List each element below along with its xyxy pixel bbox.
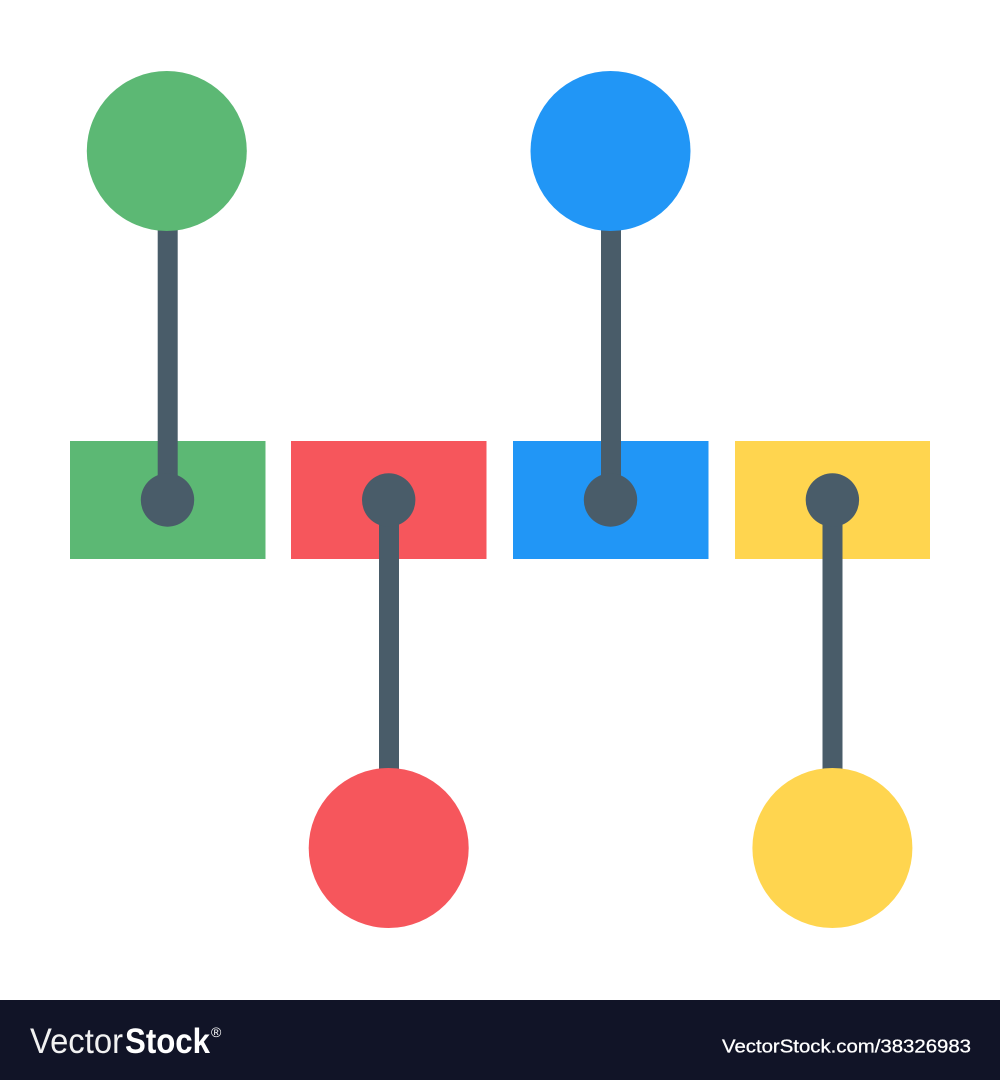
brand name: [30, 1022, 210, 1061]
brand name: Stock: [125, 1022, 210, 1061]
watermark footer bar: [0, 1000, 1000, 1080]
red milestone: [291, 441, 486, 928]
yellow milestone: [735, 441, 930, 928]
green milestone: [70, 71, 266, 559]
brand name: Vector: [30, 1022, 123, 1061]
blue milestone: [513, 71, 708, 559]
registered mark: ®: [211, 1024, 222, 1040]
image id: VectorStock.com/38326983: [722, 1036, 971, 1056]
